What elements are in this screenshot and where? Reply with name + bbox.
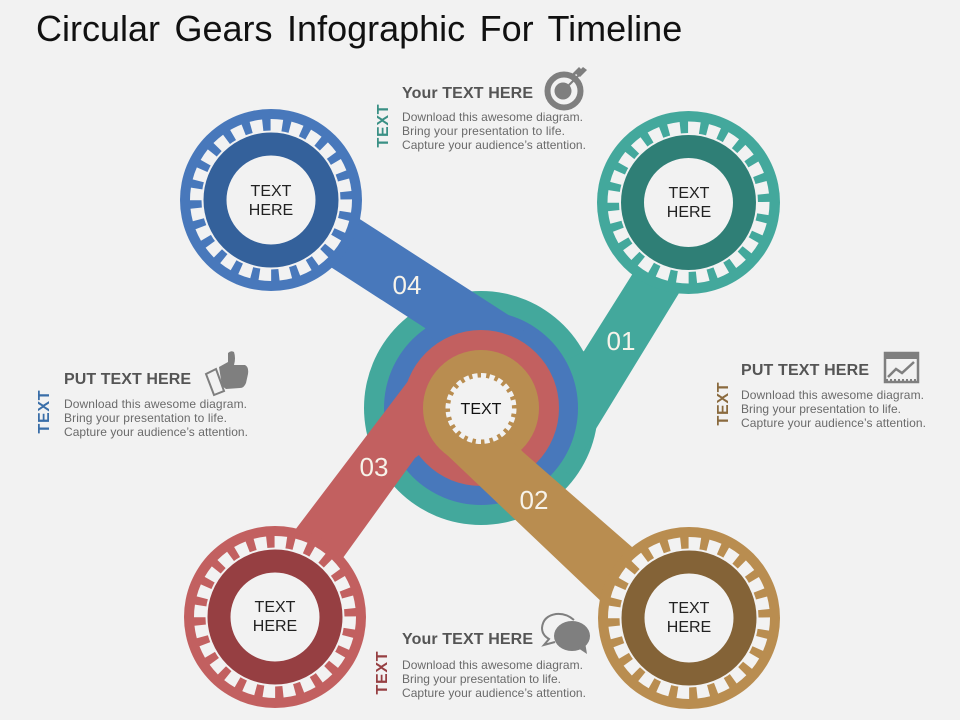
text block: bottom: Capture your audience’s attention. — [402, 686, 586, 700]
gear: teal 01: HERE — [667, 204, 711, 221]
gear: tan 02 — [598, 527, 780, 709]
arm 03 with red hub ring — [292, 330, 559, 562]
panel: central hub and arms — [292, 216, 684, 606]
center gear with label — [448, 376, 514, 442]
text block: top: Bring your presentation to life. — [402, 124, 565, 138]
center gear with label: TEXT — [461, 401, 502, 418]
title: Circular Gears Infographic For Timeline — [36, 8, 682, 49]
gear: teal 01: TEXT — [669, 185, 710, 202]
vertical label: bottom: TEXT — [374, 651, 391, 694]
arm 01 with teal hub ring — [364, 262, 684, 525]
text block: top: Your TEXT HERE — [402, 85, 533, 102]
gear: teal 01 — [597, 111, 780, 294]
text block: right: PUT TEXT HERE — [741, 362, 869, 379]
gear: red 03: TEXT — [255, 599, 296, 616]
text block: left: Capture your audience’s attention. — [64, 425, 248, 439]
text block: bottom — [402, 631, 586, 700]
vertical label: left: TEXT — [36, 390, 53, 434]
icon: speech bubbles — [542, 614, 590, 654]
text block: right: Bring your presentation to life. — [741, 402, 901, 416]
text block: top: Download this awesome diagram. — [402, 110, 583, 124]
gear: red 03: HERE — [253, 618, 297, 635]
gear: red 03 — [184, 526, 366, 708]
text block: right: Download this awesome diagram. — [741, 388, 924, 402]
vertical label: right: TEXT — [715, 382, 732, 426]
text block: right — [741, 362, 926, 430]
arm number 01: 01 — [607, 326, 635, 356]
arm 02 with tan hub ring — [423, 350, 640, 606]
arm 04 with blue hub ring — [326, 216, 578, 505]
text block: right: Capture your audience’s attention. — [741, 416, 926, 430]
gear: tan 02: HERE — [667, 619, 711, 636]
gear: blue 04 — [180, 109, 362, 291]
text block: top — [402, 85, 586, 152]
text block: bottom: Bring your presentation to life. — [402, 672, 561, 686]
text block: left: Bring your presentation to life. — [64, 411, 227, 425]
text block: bottom: Download this awesome diagram. — [402, 658, 583, 672]
vertical label: top: TEXT — [375, 104, 392, 148]
gear: blue 04: HERE — [249, 202, 293, 219]
icon: thumbs up — [206, 351, 248, 395]
icon: target — [548, 67, 587, 108]
arm number 02: 02 — [520, 485, 548, 515]
text block: left: Download this awesome diagram. — [64, 397, 247, 411]
arm number 03: 03 — [360, 452, 388, 482]
text block: top: Capture your audience’s attention. — [402, 138, 586, 152]
text block: bottom: Your TEXT HERE — [402, 631, 533, 648]
icon: chart window — [885, 353, 918, 382]
gear: tan 02: TEXT — [669, 600, 710, 617]
gear: blue 04: TEXT — [251, 183, 292, 200]
text block: left — [64, 371, 248, 439]
arm number 04: 04 — [393, 270, 421, 300]
text block: left: PUT TEXT HERE — [64, 371, 191, 388]
